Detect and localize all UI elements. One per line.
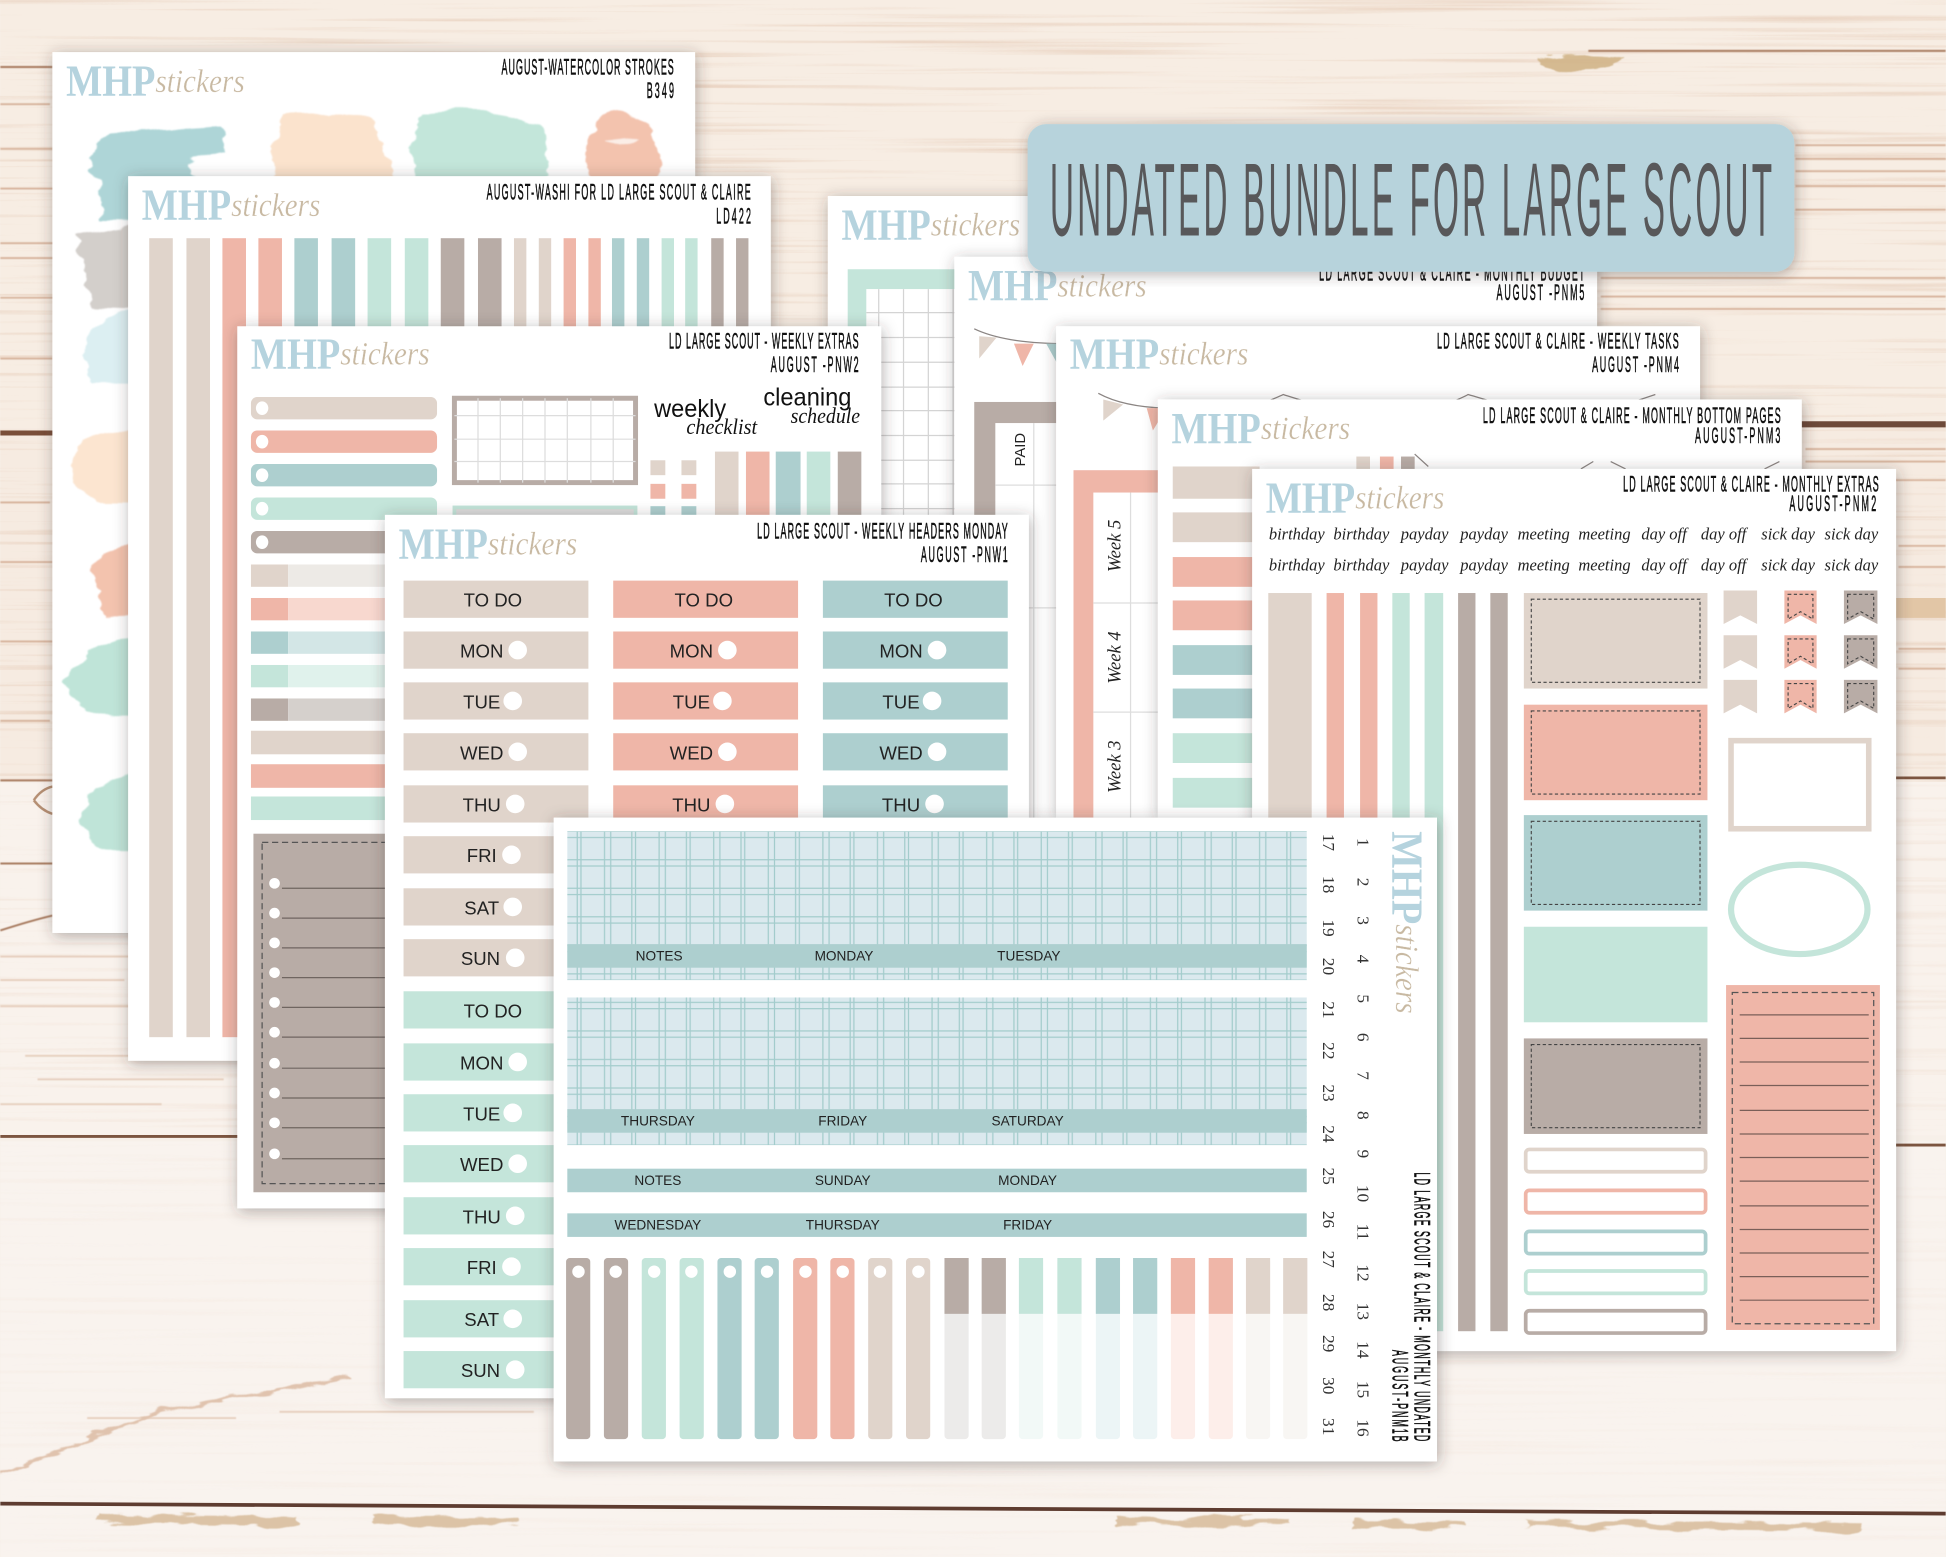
script word stickers: sick day bbox=[1825, 556, 1879, 575]
vertical sheet title bbox=[1387, 1172, 1434, 1442]
date numbers 1 to 16: 7 bbox=[1354, 1071, 1373, 1080]
coral header column: THU bbox=[672, 794, 710, 815]
date numbers 17 to 31: 21 bbox=[1319, 1001, 1338, 1019]
coral header column: TO DO bbox=[675, 590, 733, 611]
blue header column: WED bbox=[879, 742, 923, 763]
sticker sheet: weekly extras bbox=[237, 326, 881, 1208]
date numbers 1 to 16: 10 bbox=[1354, 1185, 1373, 1202]
blue header column: MON bbox=[879, 641, 923, 662]
logo bbox=[66, 56, 245, 106]
date numbers 17 to 31: 24 bbox=[1319, 1125, 1338, 1143]
script word stickers: day off bbox=[1641, 525, 1689, 544]
tan and mint header column: THU bbox=[463, 1206, 501, 1227]
logo bbox=[142, 180, 320, 230]
plaid panel 1 bbox=[567, 831, 1307, 980]
logo: MHP bbox=[1172, 403, 1261, 453]
weekly checklist and cleaning schedule titles: weekly bbox=[653, 396, 727, 423]
weekly checklist and cleaning schedule titles: schedule bbox=[791, 403, 860, 428]
sheet title: LD LARGE SCOUT & CLAIRE - MONTHLY BOTTOM PAGES bbox=[1483, 403, 1781, 428]
logo bbox=[251, 328, 430, 378]
coral header column: WED bbox=[670, 742, 713, 763]
script word stickers: payday bbox=[1459, 556, 1509, 575]
script word stickers: meeting bbox=[1578, 556, 1631, 575]
date numbers 17 to 31: 18 bbox=[1319, 876, 1338, 894]
header band: notes sunday monday: NOTES bbox=[634, 1173, 681, 1188]
sheet title: AUGUST-WASHI FOR LD LARGE SCOUT & CLAIRE bbox=[487, 180, 751, 205]
watercolor strokes bbox=[67, 110, 660, 851]
date numbers 17 to 31: 17 bbox=[1319, 834, 1338, 851]
vertical logo: stickers bbox=[1389, 924, 1425, 1014]
weekly checklist and cleaning schedule titles bbox=[653, 385, 860, 439]
script word stickers bbox=[1269, 525, 1879, 575]
date numbers 1 to 16: 1 bbox=[1354, 838, 1373, 847]
sheet title: AUGUST -PNM5 bbox=[1497, 281, 1584, 305]
bunting bbox=[1098, 393, 1655, 431]
tan and mint header column: SUN bbox=[461, 1360, 500, 1381]
tan and mint header column: TUE bbox=[463, 691, 500, 712]
script word stickers: sick day bbox=[1761, 556, 1816, 575]
sheet title: LD LARGE SCOUT & CLAIRE - WEEKLY TASKS bbox=[1437, 329, 1679, 354]
date numbers 17 to 31: 27 bbox=[1319, 1251, 1338, 1268]
tan and mint header column: FRI bbox=[467, 845, 497, 866]
date numbers 17 to 31: 23 bbox=[1319, 1084, 1338, 1102]
date numbers 17 to 31: 20 bbox=[1319, 958, 1338, 975]
vertical sheet title: LD LARGE SCOUT & CLAIRE - MONTHLY UNDATED bbox=[1409, 1172, 1434, 1441]
script word stickers: birthday bbox=[1269, 525, 1325, 544]
sheet title bbox=[669, 329, 859, 377]
small squares and colour strips bbox=[650, 452, 861, 526]
sheet title: AUGUST -PNM4 bbox=[1592, 352, 1679, 377]
logo: stickers bbox=[1261, 410, 1350, 446]
script word stickers: day off bbox=[1701, 525, 1749, 544]
script word stickers: birthday bbox=[1269, 556, 1325, 575]
tan and mint header column: SAT bbox=[464, 1309, 499, 1330]
script word stickers: payday bbox=[1459, 525, 1509, 544]
white frame and oval bbox=[1731, 741, 1869, 954]
date numbers 1 to 16: 12 bbox=[1354, 1264, 1373, 1282]
weekly task frame: Week 5 bbox=[1105, 520, 1126, 572]
flags bbox=[1724, 591, 1877, 713]
header band: notes sunday monday bbox=[567, 1169, 1307, 1192]
logo bbox=[1172, 403, 1350, 453]
sheet title: AUGUST-PNM2 bbox=[1789, 491, 1876, 516]
two-tone vertical tabs bbox=[944, 1258, 1307, 1439]
header band: notes sunday monday: SUNDAY bbox=[815, 1173, 871, 1188]
weekly checklist and cleaning schedule titles: checklist bbox=[686, 414, 758, 439]
sheet title bbox=[1483, 403, 1781, 448]
logo: stickers bbox=[155, 63, 245, 99]
blue header column: THU bbox=[882, 794, 920, 815]
tan and mint header column: MON bbox=[460, 641, 503, 662]
paid tracker frame bbox=[974, 402, 1098, 818]
date numbers 17 to 31: 29 bbox=[1319, 1335, 1338, 1352]
coral header column: MON bbox=[670, 641, 713, 662]
logo: stickers bbox=[488, 526, 577, 562]
weekly checklist and cleaning schedule titles: cleaning bbox=[763, 385, 851, 412]
date numbers 1 to 16: 11 bbox=[1354, 1224, 1373, 1240]
sheet title: AUGUST -PNW1 bbox=[921, 542, 1008, 567]
header band: wednesday thursday friday: WEDNESDAY bbox=[614, 1217, 701, 1232]
logo: MHP bbox=[251, 328, 340, 378]
sheet title bbox=[1623, 472, 1879, 516]
sticker sheet: monthly undated (landscape) bbox=[554, 818, 1437, 1461]
sheet title: AUGUST-PNM3 bbox=[1695, 423, 1780, 448]
bunting bbox=[974, 329, 1067, 366]
logo: MHP bbox=[399, 518, 488, 568]
sheet title bbox=[487, 180, 751, 229]
date numbers 1 to 16: 6 bbox=[1354, 1033, 1373, 1042]
sheet title: AUGUST-WATERCOLOR STROKES bbox=[502, 55, 674, 80]
date numbers 17 to 31: 19 bbox=[1319, 919, 1338, 937]
sticker sheet: August washi bbox=[128, 176, 771, 1061]
logo: MHP bbox=[968, 260, 1057, 310]
sticker sheet: monthly extras bbox=[1252, 469, 1896, 1351]
outlined rounded bars bbox=[1526, 1149, 1706, 1333]
logo bbox=[1266, 472, 1444, 522]
sheet title bbox=[1437, 329, 1679, 377]
sheet title: LD LARGE SCOUT & CLAIRE - MONTHLY BUDGET bbox=[1319, 261, 1585, 286]
logo bbox=[1070, 328, 1248, 378]
logo: stickers bbox=[1355, 480, 1444, 516]
date numbers 17 to 31: 28 bbox=[1319, 1294, 1338, 1312]
tan and mint header column: MON bbox=[460, 1052, 503, 1073]
script word stickers: birthday bbox=[1333, 556, 1390, 575]
plaid panel 1: MONDAY bbox=[815, 948, 873, 963]
taupe checklist panel bbox=[253, 834, 440, 1192]
vertical strips bbox=[1268, 593, 1508, 1331]
date numbers 1 to 16: 13 bbox=[1354, 1303, 1373, 1320]
plaid panel 1: NOTES bbox=[636, 948, 683, 963]
date numbers 1 to 16: 16 bbox=[1354, 1419, 1373, 1437]
blue header column bbox=[823, 581, 1008, 823]
plaid panel 1: TUESDAY bbox=[997, 948, 1061, 963]
script word stickers: meeting bbox=[1518, 525, 1570, 544]
tan and mint header column: TO DO bbox=[464, 1000, 522, 1021]
sticker sheet: weekly tasks bbox=[1056, 326, 1700, 818]
sheet title bbox=[1319, 261, 1585, 305]
sheet title: LD LARGE SCOUT - WEEKLY HEADERS MONDAY bbox=[757, 519, 1008, 544]
tan and mint header column: WED bbox=[460, 742, 503, 763]
logo: MHP bbox=[1070, 328, 1159, 378]
weekly task frame: Week 4 bbox=[1105, 631, 1126, 684]
date numbers 17 to 31: 22 bbox=[1319, 1042, 1338, 1059]
logo: MHP bbox=[841, 199, 931, 249]
weekly task frame: Week 3 bbox=[1105, 740, 1126, 793]
plaid panel 2: SATURDAY bbox=[992, 1113, 1064, 1128]
tan and mint header column: TUE bbox=[463, 1103, 500, 1124]
sticker sheet: August watercolor strokes bbox=[52, 52, 695, 933]
script word stickers: payday bbox=[1400, 525, 1449, 544]
logo bbox=[399, 518, 577, 568]
logo: stickers bbox=[231, 187, 320, 223]
rounded tabs with dots bbox=[251, 397, 437, 553]
date numbers 1 to 16 bbox=[1354, 838, 1373, 1437]
date numbers 1 to 16: 3 bbox=[1354, 916, 1373, 925]
logo bbox=[968, 260, 1147, 310]
script word stickers: meeting bbox=[1518, 556, 1570, 575]
paid tracker frame: PAID bbox=[1013, 433, 1029, 466]
tan and mint header column: SUN bbox=[461, 948, 500, 969]
logo: MHP bbox=[66, 56, 155, 106]
script word stickers: meeting bbox=[1578, 525, 1631, 544]
plaid panel 2 bbox=[567, 997, 1307, 1145]
weekly task frame bbox=[1073, 470, 1185, 818]
date numbers 17 to 31: 26 bbox=[1319, 1211, 1338, 1229]
title banner: UNDATED BUNDLE FOR LARGE SCOUT bbox=[1050, 143, 1772, 259]
large dashed boxes bbox=[1524, 593, 1707, 1134]
dotted vertical tabs bbox=[566, 1258, 930, 1439]
date numbers 1 to 16: 15 bbox=[1354, 1381, 1373, 1398]
date numbers 1 to 16: 4 bbox=[1354, 955, 1373, 964]
header band: notes sunday monday: MONDAY bbox=[998, 1173, 1057, 1188]
logo bbox=[841, 199, 1020, 249]
vertical sheet title: AUGUST-PNM1B bbox=[1387, 1350, 1412, 1442]
washi strips bbox=[149, 238, 748, 1037]
sticker sheet: weekly headers monday bbox=[385, 515, 1029, 1398]
tan and mint header column: FRI bbox=[467, 1257, 497, 1278]
script word stickers: day off bbox=[1641, 556, 1689, 575]
sheet title: AUGUST -PNW2 bbox=[771, 352, 859, 377]
blue header column: TO DO bbox=[884, 590, 943, 611]
date numbers 1 to 16: 14 bbox=[1354, 1341, 1373, 1359]
date numbers 17 to 31: 30 bbox=[1319, 1377, 1338, 1395]
tan and mint header column: SAT bbox=[464, 897, 499, 918]
plaid panel 2: FRIDAY bbox=[818, 1113, 867, 1128]
logo: stickers bbox=[340, 336, 430, 372]
date numbers 1 to 16: 5 bbox=[1354, 994, 1373, 1003]
vertical logo: MHP bbox=[1382, 831, 1432, 924]
plaid panel 2: THURSDAY bbox=[621, 1113, 695, 1128]
logo: stickers bbox=[931, 207, 1020, 243]
logo: MHP bbox=[1266, 472, 1355, 522]
sticker sheet: grid page bbox=[828, 196, 1470, 818]
script word stickers: sick day bbox=[1825, 525, 1879, 544]
sheet title bbox=[757, 519, 1008, 567]
sheet title: B349 bbox=[647, 78, 674, 103]
coral header column bbox=[613, 581, 798, 823]
sticker sheet: monthly bottom pages bbox=[1158, 399, 1802, 818]
tan and mint header column: WED bbox=[460, 1154, 503, 1175]
logo: MHP bbox=[142, 180, 231, 230]
grid boxes bbox=[454, 398, 636, 557]
header band: wednesday thursday friday: FRIDAY bbox=[1003, 1217, 1052, 1232]
sheet title: LD422 bbox=[716, 204, 751, 229]
sheet title: LD LARGE SCOUT - WEEKLY EXTRAS bbox=[669, 329, 859, 354]
date numbers 17 to 31: 25 bbox=[1319, 1167, 1338, 1185]
date numbers 17 to 31: 31 bbox=[1319, 1418, 1338, 1435]
script word stickers: day off bbox=[1701, 556, 1749, 575]
script word stickers: payday bbox=[1400, 556, 1449, 575]
date numbers 17 to 31 bbox=[1319, 834, 1338, 1435]
tan and mint header column: TO DO bbox=[464, 590, 522, 611]
coral header column: TUE bbox=[673, 691, 710, 712]
sheet title: LD LARGE SCOUT & CLAIRE - MONTHLY EXTRAS bbox=[1623, 472, 1879, 497]
logo: stickers bbox=[1057, 268, 1147, 304]
logo: stickers bbox=[1159, 336, 1248, 372]
date numbers 1 to 16: 9 bbox=[1354, 1149, 1373, 1158]
date numbers 1 to 16: 2 bbox=[1354, 878, 1373, 886]
sticker sheet: monthly budget bbox=[954, 257, 1597, 818]
colour strips bbox=[1173, 454, 1779, 808]
blue header column: TUE bbox=[882, 691, 920, 712]
header band: wednesday thursday friday: THURSDAY bbox=[806, 1217, 880, 1232]
mint framed grid bbox=[848, 269, 980, 818]
sheet title bbox=[502, 55, 674, 103]
coral lined notes box bbox=[1726, 985, 1880, 1330]
script word stickers: birthday bbox=[1333, 525, 1390, 544]
vertical logo bbox=[1382, 831, 1432, 1014]
header band: wednesday thursday friday bbox=[567, 1213, 1307, 1237]
tan and mint header column bbox=[404, 581, 588, 1388]
script word stickers: sick day bbox=[1761, 525, 1816, 544]
tan and mint header column: THU bbox=[463, 794, 501, 815]
date numbers 1 to 16: 8 bbox=[1354, 1111, 1373, 1120]
two-tone bars bbox=[251, 564, 437, 820]
